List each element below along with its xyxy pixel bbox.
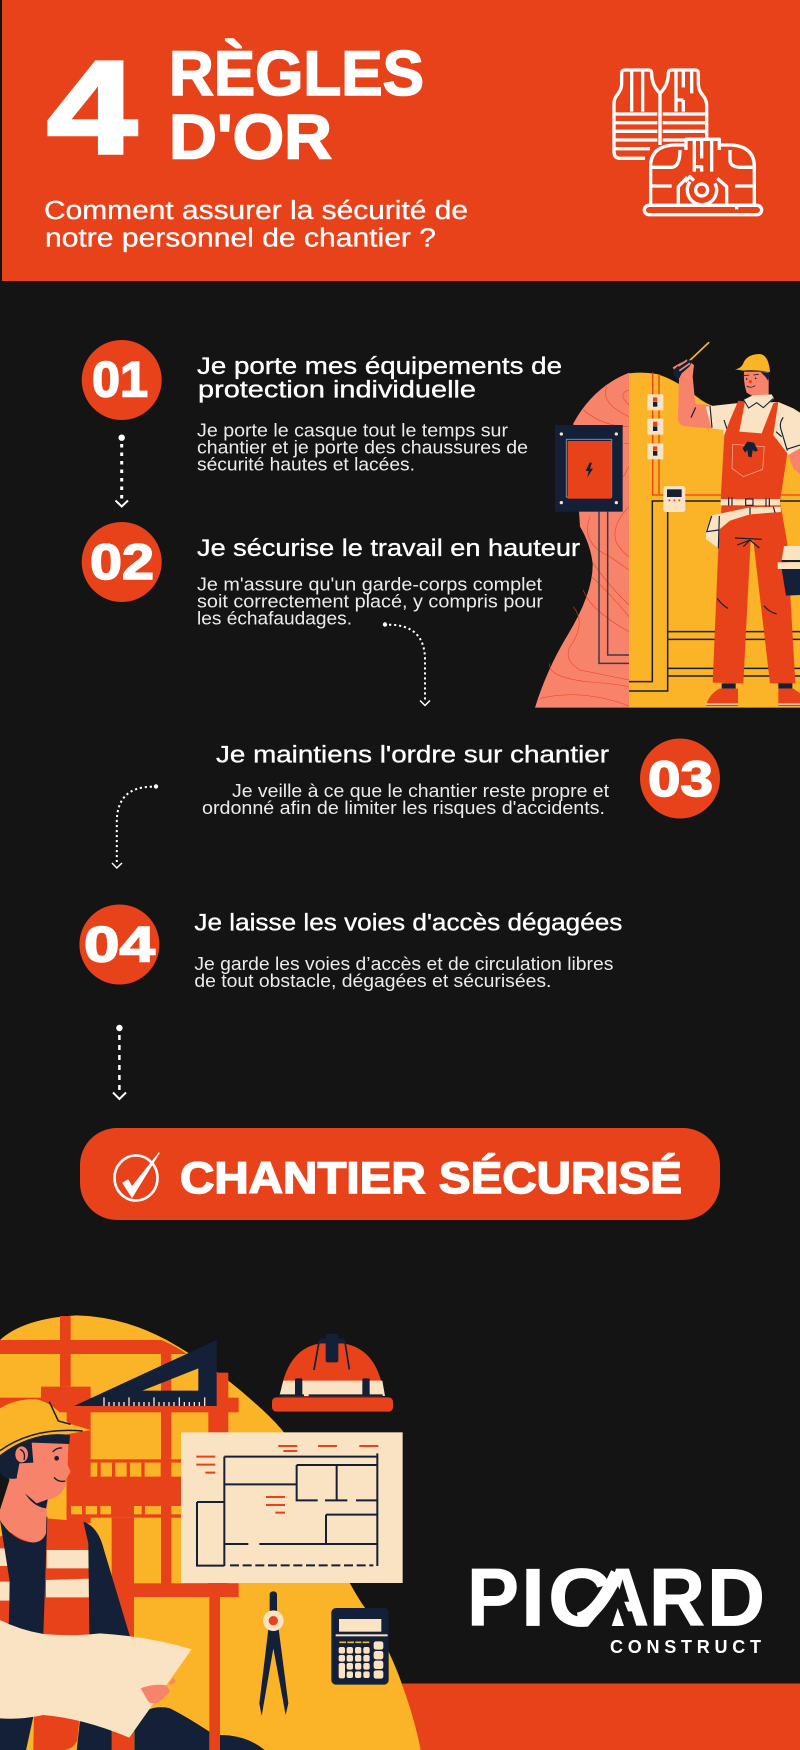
subtitle: Comment assurer la sécurité de xyxy=(44,197,468,225)
number badge 01 xyxy=(82,340,162,420)
step 1 heading: Je porte mes équipements de xyxy=(197,353,562,380)
number badge 01: 01 xyxy=(92,352,148,408)
step 1 description: Je porte le casque tout le temps sur xyxy=(197,420,508,440)
step 1 description: chantier et je porte des chaussures de xyxy=(197,438,528,458)
hard hat xyxy=(272,1334,393,1412)
step 3 xyxy=(202,738,720,818)
arrow: step 2 to 3 xyxy=(383,622,430,706)
step 2 description: les échafaudages. xyxy=(197,608,352,628)
illustration: site engineer with plans xyxy=(0,1315,421,1750)
logo: Picard Construct: D xyxy=(707,1552,765,1644)
shirt xyxy=(706,402,800,455)
icon: safety vest and helmet xyxy=(614,70,762,215)
logo: Picard Construct: C xyxy=(548,1552,612,1644)
number badge 04 xyxy=(79,904,159,984)
step 4 description: Je garde les voies d’accès et de circulation libres xyxy=(194,954,613,974)
switches xyxy=(647,394,663,459)
toolbox xyxy=(778,546,800,596)
orange footer strip xyxy=(400,1684,800,1750)
title: RÈGLES xyxy=(169,39,424,109)
number badge 03: 03 xyxy=(648,751,713,807)
number badge 02: 02 xyxy=(90,534,154,590)
step 2 description: soit correctement placé, y compris pour xyxy=(197,592,543,612)
arrow: step 4 to result xyxy=(113,1025,126,1099)
callout: chantier sécurisé xyxy=(80,1128,720,1220)
step 1 heading xyxy=(197,353,562,404)
step 1 xyxy=(82,340,562,474)
title xyxy=(169,39,424,172)
step 2 description: Je m'assure qu'un garde-corps complet xyxy=(197,574,542,594)
logo: Picard Construct: I xyxy=(521,1552,545,1644)
blueprint roll in hands xyxy=(0,1620,192,1738)
arrow: step 1 to 2 xyxy=(116,434,128,506)
orange conduit lines xyxy=(653,373,800,495)
engineer xyxy=(0,1399,130,1750)
step 1 description: sécurité hautes et lacées. xyxy=(197,454,415,474)
step 3 description xyxy=(202,781,609,818)
scaffold yellow openings xyxy=(71,1463,181,1514)
number badge 03 xyxy=(640,738,720,818)
calculator xyxy=(331,1608,389,1685)
compass xyxy=(259,1591,288,1716)
subtitle: notre personnel de chantier ? xyxy=(45,224,436,252)
logo: Picard Construct xyxy=(467,1552,765,1657)
callout label: CHANTIER SÉCURISÉ xyxy=(180,1153,682,1203)
logo: Picard Construct: R xyxy=(649,1552,705,1644)
salmon blob with contour lines xyxy=(535,373,629,708)
step 2 xyxy=(82,522,580,628)
number badge 04: 04 xyxy=(84,916,155,972)
step 2 heading: Je sécurise le travail en hauteur xyxy=(197,535,580,562)
logo: Picard Construct: P xyxy=(467,1552,519,1644)
logo: Picard Construct: A xyxy=(596,1552,649,1644)
yellow wall xyxy=(629,373,800,708)
step 4 xyxy=(79,904,622,991)
electrical panel xyxy=(555,425,623,512)
number badge 02 xyxy=(82,522,162,602)
head xyxy=(744,372,769,397)
step 3 description: ordonné afin de limiter les risques d'accidents. xyxy=(202,798,605,818)
step 1 heading: protection individuelle xyxy=(198,376,476,404)
title: D'OR xyxy=(169,102,332,172)
subtitle xyxy=(44,197,468,252)
step 1 description xyxy=(197,420,528,474)
big number 4: 4 xyxy=(47,34,137,181)
set square xyxy=(74,1340,217,1406)
icon: check mark xyxy=(114,1153,159,1200)
step 4 description xyxy=(194,954,613,991)
blueprint xyxy=(181,1432,403,1583)
wiring xyxy=(599,512,629,663)
logo: Picard Construct: CONSTRUCT xyxy=(610,1637,761,1657)
worker xyxy=(673,343,800,706)
step 4 heading: Je laisse les voies d'accès dégagées xyxy=(194,910,622,936)
scaffold xyxy=(0,1316,239,1750)
yellow blob xyxy=(0,1315,421,1750)
bottom dark shape xyxy=(134,1707,265,1750)
step 4 description: de tout obstacle, dégagées et sécurisées. xyxy=(194,971,551,991)
panel: header banner xyxy=(2,0,800,281)
arrow: step 3 to 4 xyxy=(112,784,158,868)
step 3 heading: Je maintiens l'ordre sur chantier xyxy=(216,742,609,768)
step 2 description xyxy=(197,574,543,628)
thermostat xyxy=(663,486,685,512)
illustration: electrician at work xyxy=(535,343,800,708)
step 3 description: Je veille à ce que le chantier reste propre et xyxy=(232,781,609,801)
